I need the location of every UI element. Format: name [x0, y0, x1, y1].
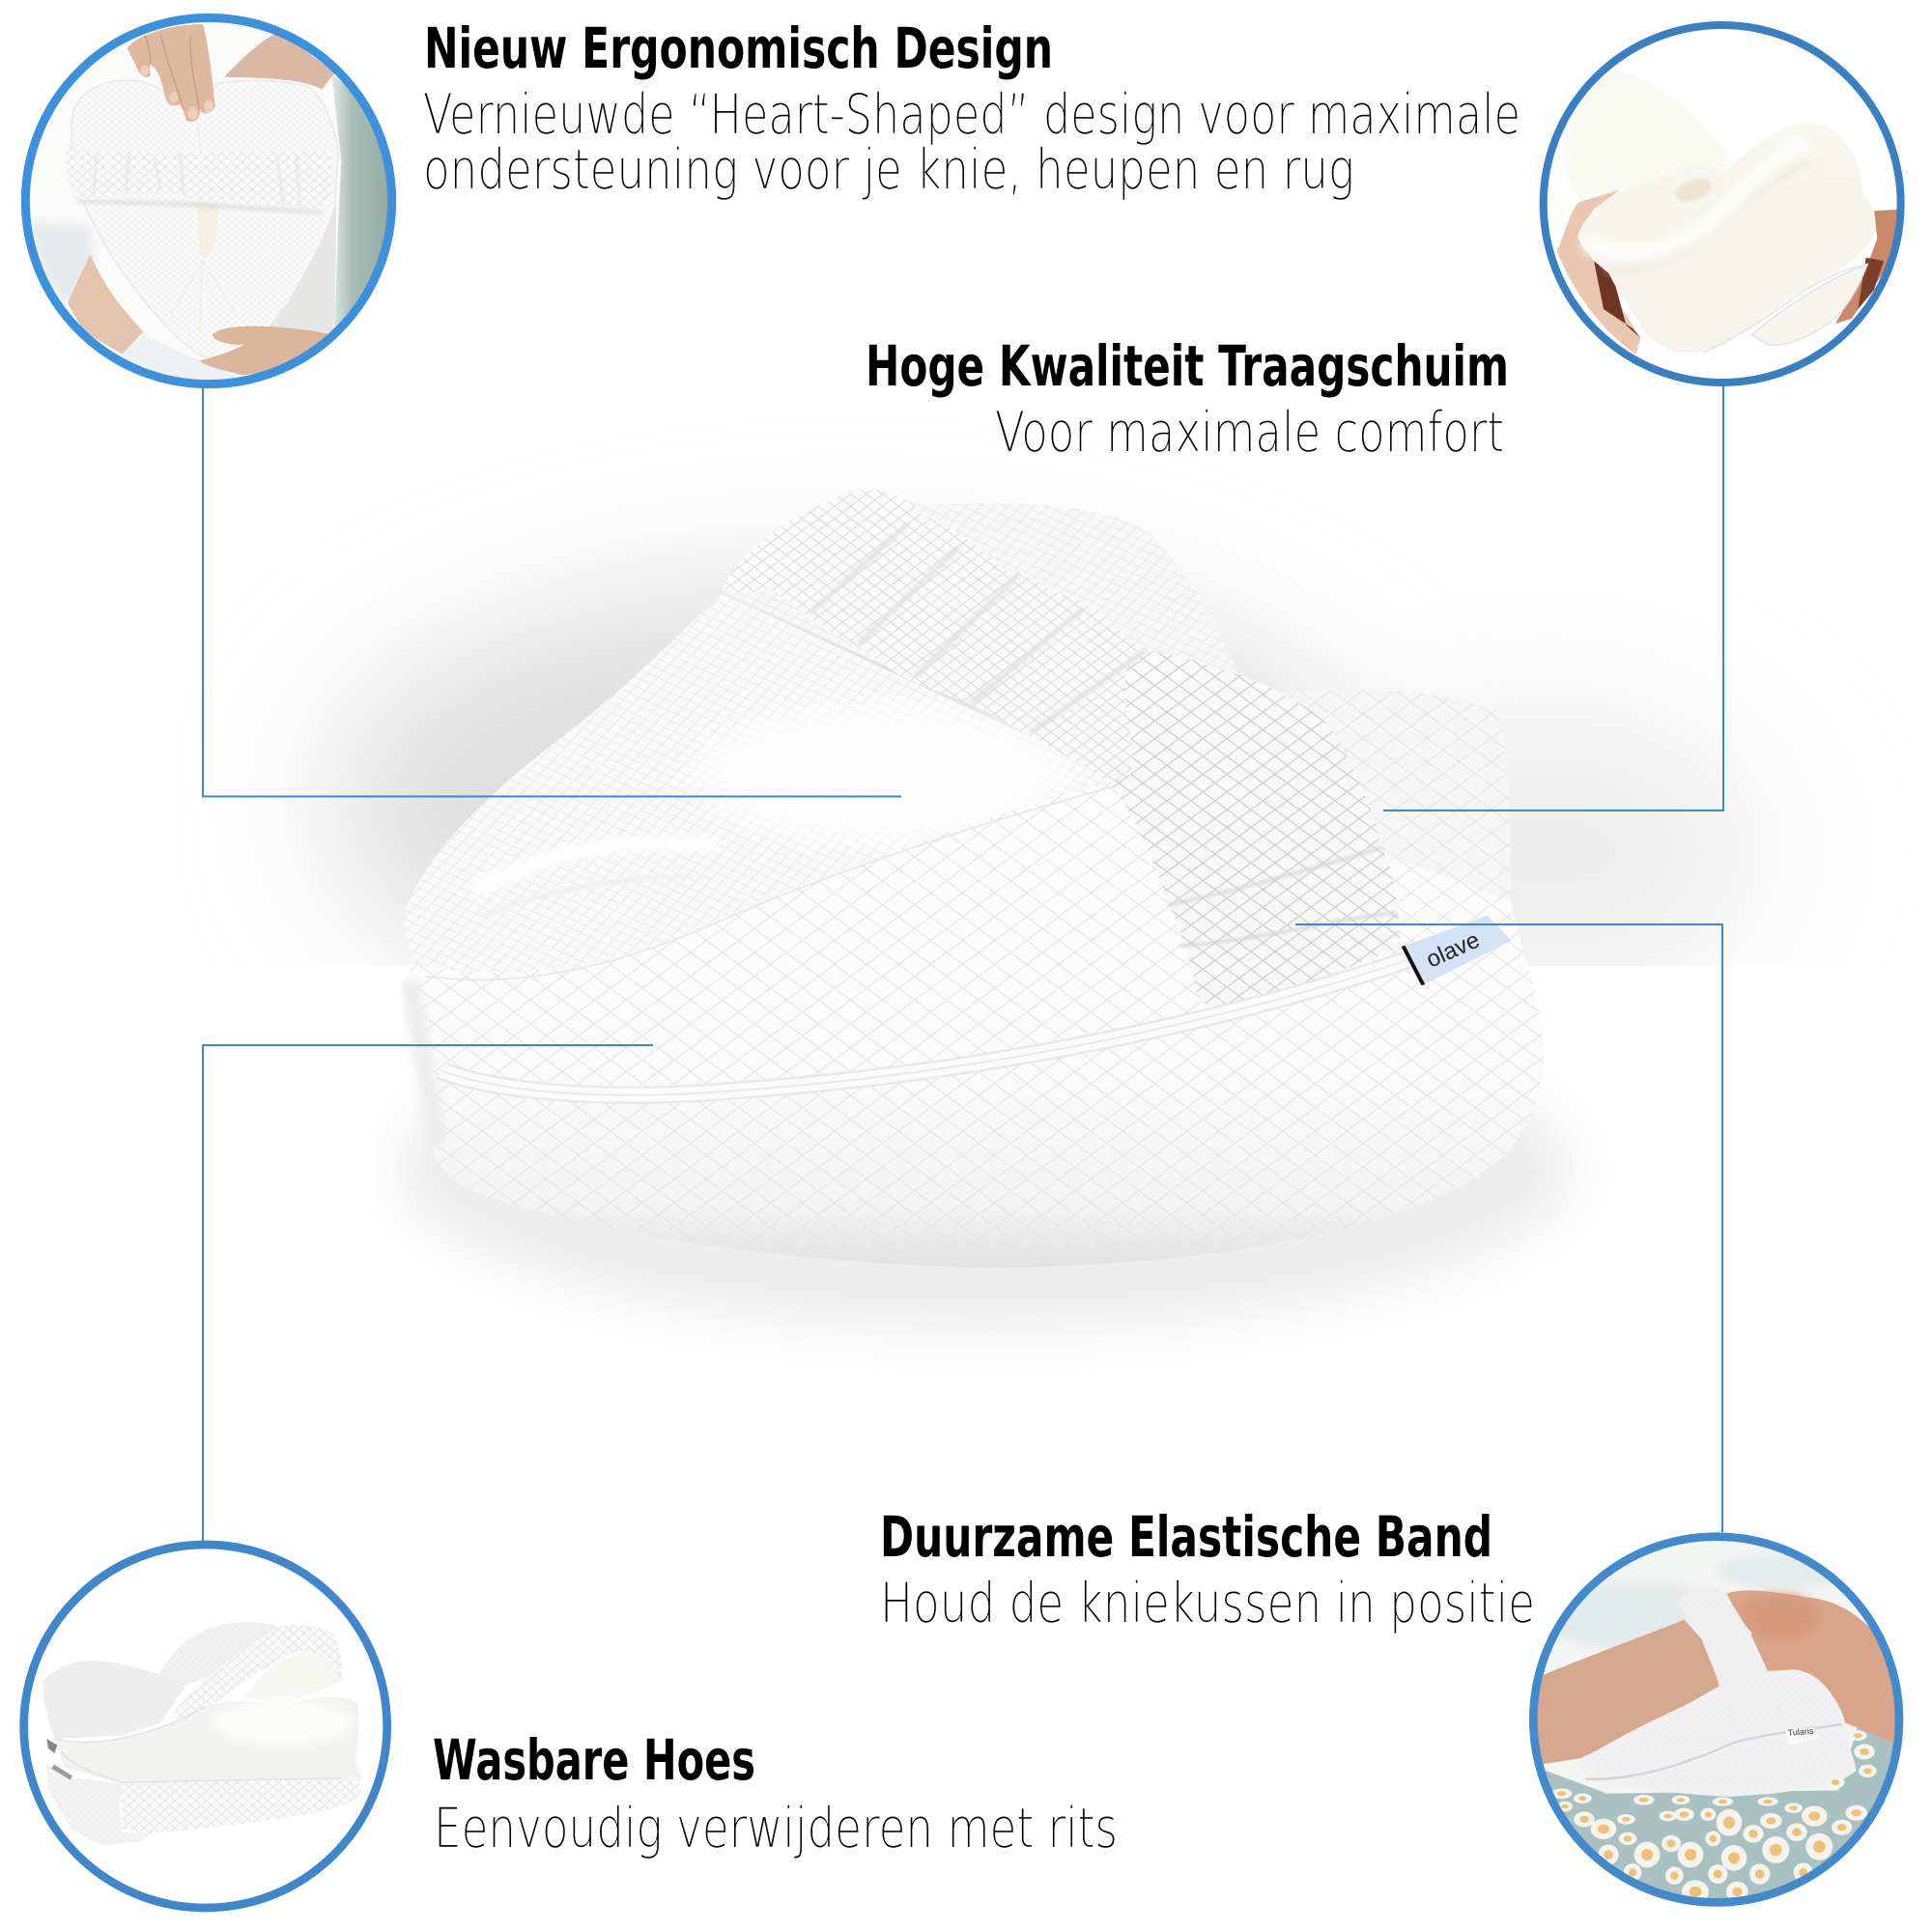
ring	[24, 1545, 387, 1908]
feature text: Nieuw Ergonomisch Design: ondersteuning voor je knie, heupen en rug	[423, 138, 1354, 202]
feature text: Hoge Kwaliteit Traagschuim: Voor maximale comfort	[995, 401, 1504, 465]
feature text: Hoge Kwaliteit Traagschuim	[866, 333, 1509, 465]
ring	[1533, 1537, 1899, 1902]
feature text: Duurzame Elastische Band	[880, 1504, 1535, 1635]
connector: top-right circle to pillow	[1383, 384, 1723, 810]
ring	[25, 17, 392, 384]
feature text: Duurzame Elastische Band: Houd de kniekussen in positie	[880, 1572, 1535, 1635]
photo circle: memory foam core	[1542, 22, 1902, 384]
main pillow	[405, 489, 1544, 1267]
feature text: Nieuw Ergonomisch Design	[423, 15, 1520, 202]
connector: bottom-right circle to strap	[1295, 924, 1722, 1532]
left wedge	[405, 594, 1122, 974]
pillow label text in photo: Tularis	[1787, 1726, 1814, 1738]
feature text: Nieuw Ergonomisch Design: Vernieuwde “Heart-Shaped” design voor maximale	[423, 83, 1520, 147]
rear lobe	[723, 489, 1243, 774]
right block	[1243, 690, 1519, 963]
feature text: Wasbare Hoes	[433, 1727, 1118, 1861]
connector: top-left circle to pillow	[203, 388, 901, 796]
photo circle: pillow between knees with elastic band	[1529, 1537, 1910, 1922]
ring	[1544, 25, 1901, 383]
connector: bottom-left circle to pillow cover	[203, 1045, 653, 1541]
feature text: Wasbare Hoes: Wasbare Hoes	[433, 1727, 755, 1793]
feature text: Wasbare Hoes: Eenvoudig verwijderen met rits	[434, 1797, 1118, 1861]
brand label	[1404, 916, 1511, 985]
brand label text: olave	[1422, 926, 1484, 973]
photo circle: heart-shaped pillow held by hands	[25, 17, 399, 386]
front body	[409, 780, 1544, 1267]
feature text: Hoge Kwaliteit Traagschuim: Hoge Kwaliteit Traagschuim	[866, 333, 1509, 399]
feature text: Nieuw Ergonomisch Design: Nieuw Ergonomisch Design	[424, 15, 1053, 81]
photo circle: removed washable cover	[23, 1545, 387, 1908]
background haze behind pillow	[328, 580, 1768, 1333]
elastic strap	[723, 489, 1401, 1011]
feature text: Duurzame Elastische Band: Duurzame Elastische Band	[880, 1504, 1492, 1570]
zipper	[442, 960, 1407, 1095]
